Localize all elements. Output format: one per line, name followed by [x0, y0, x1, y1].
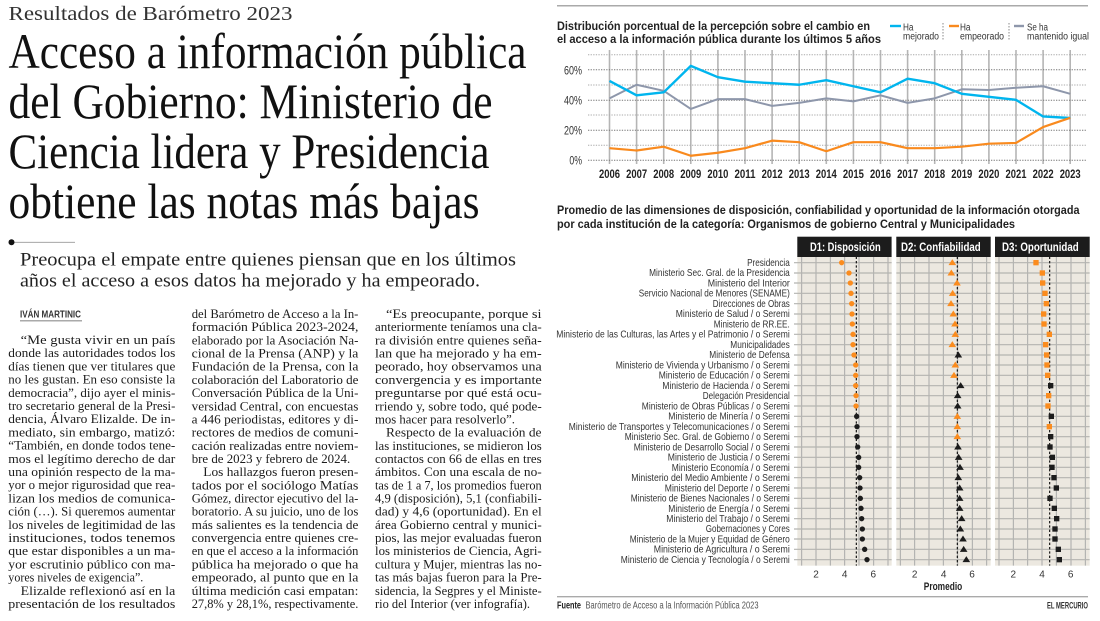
text column 3: sidencia, la Segpres y el Ministe-: [375, 583, 542, 598]
text column 1: los niveles de legitimidad de las: [8, 517, 175, 532]
header: D3: D3: Oportunidad: [1002, 240, 1079, 254]
title: Ciencia lidera y Presidencia: [8, 123, 490, 179]
text column 2: boratorio. A su juicio, uno de los: [192, 504, 358, 519]
text column 3: rriendo y, sobre todo, qué pode-: [375, 398, 542, 413]
institution labels: Ministerio de Educación / o Seremi: [659, 370, 790, 382]
legend: Ha: [903, 22, 914, 34]
title: [8, 23, 526, 229]
x axis years: 2012: [762, 169, 783, 181]
x axis years: 2011: [734, 169, 756, 181]
axis: D3 ticks: [1011, 570, 1074, 580]
institution labels: Ministerio de Desarrollo Social / o Seremi: [634, 441, 790, 453]
legend: [890, 22, 1089, 42]
text column 2: Los hallazgos fueron presen-: [203, 464, 358, 479]
text column 2: Fundación de la Prensa, con la: [192, 359, 359, 374]
institution labels: Ministerio de Agricultura / o Seremi: [654, 544, 790, 556]
title: Acceso a información pública: [8, 23, 526, 79]
axis: D3 ticks: 2: [1011, 570, 1017, 580]
text column 2: formación Pública 2023-2024,: [192, 319, 358, 334]
title: obtiene las notas más bajas: [8, 173, 480, 229]
text column 2: elaborado por la Asociación Na-: [192, 332, 358, 347]
institution labels: Ministerio Sec. Gral. de la Presidencia: [649, 267, 790, 279]
text column 1: tro secretario general de la Presi-: [8, 398, 175, 413]
bullet rule: [8, 239, 75, 245]
text column 3: tas más bajas fueron para la Pre-: [375, 570, 542, 585]
axis title: Promedio: [924, 581, 962, 593]
text column 1: no les gustan. En eso consiste la: [8, 372, 176, 387]
text column 1: mediato, sin embargo, matizó:: [8, 424, 175, 439]
axis: D3 ticks: 6: [1068, 570, 1074, 580]
text column 3: cultura y Mujer, mientras las no-: [375, 556, 542, 571]
line chart title: el acceso a la información pública durante los últimos 5 años: [557, 34, 881, 46]
text column 1: presentación de los resultados: [8, 596, 175, 611]
institution labels: Ministerio del Medio Ambiente / o Seremi: [631, 472, 790, 484]
text column 2: empeorado, al punto que en la: [192, 570, 359, 585]
x axis years: 2009: [680, 169, 701, 181]
institution labels: Ministerio de Vivienda y Urbanismo / o Seremi: [616, 359, 790, 371]
legend: mejorado: [903, 32, 939, 42]
text column 3: preguntarse por qué está ocu-: [375, 385, 542, 400]
institution labels: Ministerio de la Mujer y Equidad de Género: [630, 534, 790, 546]
institution labels: Direcciones de Obras: [713, 298, 790, 310]
legend: mantenido igual: [1027, 32, 1089, 42]
text column 3: convergencia y es importante: [375, 372, 542, 387]
text column 1: mos el legítimo derecho de dar: [8, 451, 176, 466]
text column 3: rio del Interior (ver infografía).: [375, 596, 530, 611]
x axis years: 2023: [1060, 169, 1081, 181]
x axis years: 2021: [1006, 169, 1027, 181]
text column 3: 4,9 (disposición), 5,1 (confiabili-: [375, 490, 542, 506]
text column 3: peorado, hoy observamos una: [375, 359, 542, 374]
panel: D1 Disposición: [797, 237, 892, 580]
deck: Preocupa el empate entre quienes piensan que en los últimos: [20, 250, 516, 270]
axis: D1 ticks: 6: [871, 570, 877, 580]
y axis labels: 60%: [564, 64, 582, 78]
text column 3: ámbitos. Con una escala de no-: [375, 464, 542, 479]
source: Fuente: [557, 600, 581, 612]
text column 1: instituciones, todos tenemos: [8, 530, 175, 545]
legend: empeorado: [960, 32, 1004, 42]
text column 1: yor escrutinio público con ma-: [8, 556, 175, 571]
text column 3: las instituciones, se midieron los: [375, 438, 542, 453]
x axis years: 2006: [599, 169, 620, 181]
text column 2: tados por el sociólogo Matías: [192, 477, 358, 492]
text column 1: lizan los medios de comunica-: [8, 490, 175, 505]
dot chart title: [557, 205, 1080, 231]
institution labels: Municipalidades: [730, 339, 790, 351]
institution labels: Gobernaciones y Cores: [706, 523, 790, 535]
markers: D1 circles: [839, 260, 870, 562]
axis: D2 ticks: 4: [941, 570, 947, 580]
markers: D3 squares: [1033, 260, 1062, 562]
axis: D2 ticks: 2: [912, 570, 918, 580]
institution labels: Ministerio de Energía / o Seremi: [668, 503, 790, 515]
dot chart title: Promedio de las dimensiones de disposición, confiabilidad y oportunidad de la información otorgada: [557, 205, 1080, 217]
markers: D2 triangles: [947, 259, 970, 562]
institution labels: Ministerio de las Culturas, las Artes y el Patrimonio / o Seremi: [556, 329, 790, 341]
x axis years: 2010: [707, 169, 728, 181]
panel: D3 Oportunidad: [995, 237, 1090, 580]
text column 1: yores niveles de exigencia”.: [8, 570, 143, 585]
text column 3: los ministerios de Ciencia, Agri-: [375, 543, 542, 558]
institution labels: Ministerio del Trabajo / o Seremi: [666, 513, 790, 525]
text column 1: Elizalde reflexionó así en la: [21, 583, 176, 598]
text column 3: dad) y 4,6 (oportunidad). En el: [375, 504, 542, 519]
y axis labels: 0%: [569, 154, 582, 168]
text column 3: lan que ha mejorado y ha em-: [375, 346, 542, 360]
legend: Se ha: [1027, 22, 1048, 34]
deck: años el acceso a esos datos ha mejorado y ha empeorado.: [20, 272, 480, 292]
x axis years: 2007: [626, 169, 647, 181]
axis: D1 ticks: [813, 570, 877, 580]
institution labels: Ministerio de Defensa: [709, 349, 790, 361]
text column 1: ción (…). Si queremos aumentar: [8, 504, 176, 519]
y axis labels: 20%: [564, 124, 582, 138]
axis: D2 ticks: 6: [969, 570, 975, 580]
text column 1: donde las autoridades todos los: [8, 345, 175, 360]
institution labels: Ministerio del Interior: [708, 278, 790, 290]
text column 2: a 446 periodistas, editores y di-: [192, 411, 358, 426]
text column 1: “Me gusta vivir en un país: [21, 332, 175, 347]
text column 3: contactos con 66 de ellas en tres: [375, 451, 542, 466]
text column 2: más salientes es la tendencia de: [192, 517, 359, 532]
text column 2: 27,8% y 28,1%, respectivamente.: [192, 596, 358, 611]
axis: D2 ticks: [912, 570, 975, 580]
text column 3: “Es preocupante, porque si: [386, 306, 542, 321]
institution labels: Delegación Presidencial: [703, 390, 790, 402]
institution labels: Ministerio de RR.EE.: [714, 318, 790, 330]
text column 2: versidad Central, con encuestas: [192, 398, 358, 413]
institution labels: Ministerio Economía / o Seremi: [672, 462, 790, 474]
text column 1: democracia”, dijo ayer el minis-: [8, 385, 175, 400]
x axis years: 2013: [789, 169, 810, 181]
x axis years: [599, 169, 1081, 181]
text column 3: pios, las mejor evaluadas fueron: [375, 530, 542, 545]
text column 3: ra división entre quienes seña-: [375, 332, 542, 347]
text column 2: Gómez, director ejecutivo del la-: [192, 490, 358, 506]
institution labels: [556, 257, 790, 566]
dot chart title: por cada institución de la categoría: Organismos de gobierno Central y Municipalidades: [557, 219, 1015, 231]
text column 2: Conversación Pública de la Uni-: [192, 385, 358, 400]
text column 1: dencia, Álvaro Elizalde. De in-: [8, 411, 175, 426]
institution labels: Ministerio de Transportes y Telecomunicaciones / o Seremi: [569, 421, 790, 433]
x axis years: 2008: [653, 169, 675, 181]
source: [557, 600, 759, 612]
deck: [20, 250, 516, 292]
institution labels: Ministerio de Ciencia y Tecnología / o Seremi: [621, 554, 790, 566]
text column 1: “También, en donde todos tene-: [8, 438, 175, 453]
x axis years: 2014: [816, 169, 837, 181]
kicker: Resultados de Barómetro 2023: [8, 3, 292, 25]
institution labels: Ministerio de Justicia / o Seremi: [668, 452, 790, 464]
institution labels: Ministerio de Minería / o Seremi: [668, 411, 790, 423]
x axis years: 2015: [843, 169, 864, 181]
text column 1: que estar disponibles a un ma-: [8, 543, 175, 558]
source: Barómetro de Acceso a la Información Pública 2023: [586, 600, 759, 612]
text column 3: Respecto de la evaluación de: [386, 425, 542, 440]
text column 2: del Barómetro de Acceso a la In-: [192, 306, 358, 321]
text column 2: [192, 306, 359, 611]
text column 2: convergencia entre quienes cre-: [192, 530, 358, 545]
text column 2: cional de la Prensa (ANP) y la: [192, 346, 359, 360]
institution labels: Ministerio del Deporte / o Seremi: [665, 482, 790, 494]
line chart: [564, 50, 1087, 168]
text column 1: yor o mejor rigurosidad que rea-: [8, 477, 175, 492]
institution labels: Ministerio Sec. Gral. de Gobierno / o Seremi: [625, 431, 790, 443]
panel: D2 Confiabilidad: [896, 237, 991, 580]
institution labels: Ministerio de Hacienda / o Seremi: [662, 380, 790, 392]
text column 3: anteriormente teníamos una cla-: [375, 319, 542, 334]
text column 3: [375, 306, 542, 611]
header: D2: [896, 237, 991, 257]
text column 2: última medición casi empatan:: [192, 583, 358, 598]
x axis years: 2018: [924, 169, 946, 181]
text column 1: días tienen que ver titulares que: [8, 358, 176, 373]
text column 1: [8, 332, 176, 611]
legend: Ha: [960, 22, 971, 34]
line chart title: Distribución porcentual de la percepción sobre el cambio en: [557, 21, 870, 33]
text column 2: rectores de medios de comuni-: [192, 425, 358, 440]
text column 2: pública ha mejorado o que ha: [192, 556, 359, 571]
institution labels: Ministerio de Bienes Nacionales / o Seremi: [631, 492, 790, 504]
x axis years: 2022: [1033, 169, 1054, 181]
byline: IVÁN MARTINIC: [20, 308, 81, 320]
text column 3: tas de 1 a 7, los promedios fueron: [375, 477, 542, 492]
header: D2: D2: Confiabilidad: [901, 240, 981, 254]
y axis labels: [564, 64, 582, 168]
axis: D1 ticks: 2: [813, 570, 819, 580]
text column 2: cación realizadas entre noviem-: [192, 438, 358, 453]
institution labels: Presidencia: [747, 257, 790, 269]
text column 1: una opinión respecto de la ma-: [8, 464, 175, 479]
text column 2: colaboración del Laboratorio de: [192, 372, 359, 387]
x axis years: 2017: [897, 169, 918, 181]
y axis labels: 40%: [564, 94, 582, 108]
axis: D3 ticks: 4: [1039, 570, 1045, 580]
header: D1: [797, 237, 892, 257]
header: D3: [995, 237, 1090, 257]
text column 3: mos hacer para resolverlo”.: [375, 411, 515, 426]
institution labels: Servicio Nacional de Menores (SENAME): [639, 288, 790, 300]
x axis years: 2020: [978, 169, 999, 181]
header: D1: D1: Disposición: [810, 240, 881, 254]
panels background grid: [794, 257, 1090, 566]
x axis years: 2016: [870, 169, 891, 181]
x axis years: 2019: [951, 169, 972, 181]
axis: D1 ticks: 4: [842, 570, 848, 580]
text column 3: área Gobierno central y munici-: [375, 517, 542, 532]
line chart title: [557, 21, 881, 46]
text column 2: en que el acceso a la información: [192, 543, 359, 558]
institution labels: Ministerio de Obras Públicas / o Seremi: [642, 400, 790, 412]
title: del Gobierno: Ministerio de: [8, 73, 492, 129]
text column 2: bre de 2023 y febrero de 2024.: [192, 451, 350, 466]
institution labels: Ministerio de Salud / o Seremi: [676, 308, 790, 320]
